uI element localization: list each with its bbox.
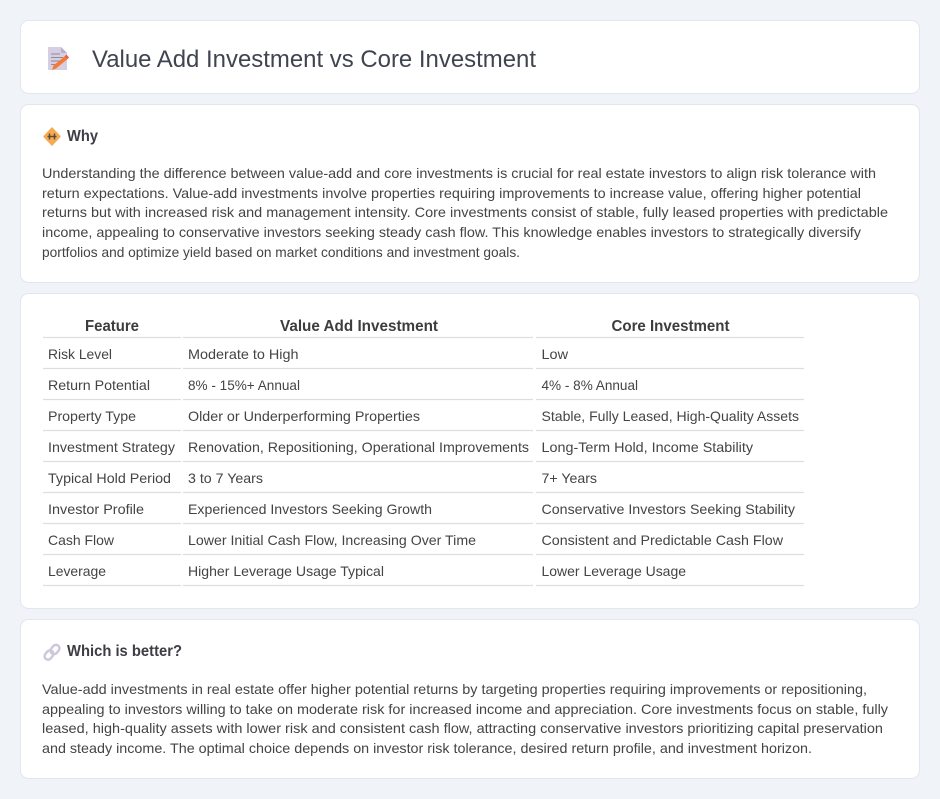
row: investor profile [48,501,795,517]
row: leverage: Lower Leverage Usage [542,563,686,579]
panel: header [20,20,920,94]
row: cash flow [48,532,784,548]
text block: which is better paragraph [42,681,888,756]
row: investor profile: Experienced Investors Seeking Growth [188,501,432,517]
row: cash flow: Lower Initial Cash Flow, Increasing Over Time [188,532,476,548]
heading: which is better: Which is better? [67,643,182,660]
row: investor profile: Investor Profile [48,501,144,517]
text block: why paragraph: Understanding the difference between value-add and core investments is crucial for real estate investors to align risk tolerance with [42,165,876,181]
text block: why paragraph: portfolios and optimize yield based on market conditions and investment goals. [42,244,520,260]
text block: why paragraph [42,165,888,260]
row: risk level: Low [542,346,569,362]
icon: chain link [43,643,61,661]
row: return potential [48,377,638,393]
text block: which is better paragraph: leased, high-quality assets with lower risk and consistent cash flow, attracting conservative investors prioritizing capital preservation [42,720,883,736]
row: risk level [48,346,569,362]
row: property type: Older or Underperforming Properties [188,408,420,424]
row: risk level: Moderate to High [188,346,298,362]
panel: why [20,104,920,282]
row: leverage: Higher Leverage Usage Typical [188,563,384,579]
row: risk level: Risk Level [48,346,112,362]
text block: why paragraph: return expectations. Value-add investments involve properties requiring improvements to increase value, offering higher potential [42,185,861,201]
text block: why paragraph: income, appealing to conservative investors seeking steady cash flow. This knowledge enables investors to strategically diversify [42,224,861,240]
row: typical hold period: 7+ Years [542,470,597,486]
row: property type [48,408,799,424]
panel: comparison table [20,294,920,608]
row: investment strategy: Long-Term Hold, Income Stability [542,439,753,455]
text block: which is better paragraph: appealing to investors willing to take on moderate risk for increased income and appreciation. Core investments focus on stable, fully [42,701,888,717]
row: property type: Stable, Fully Leased, High-Quality Assets [542,408,799,424]
icon: warning diamond [44,128,60,145]
row: investment strategy: Renovation, Repositioning, Operational Improvements [188,439,529,455]
row: leverage [48,563,686,579]
row: investment strategy: Investment Strategy [48,439,175,455]
row: cash flow: Cash Flow [48,532,115,548]
row: typical hold period: Typical Hold Period [48,470,171,486]
row: return potential: Return Potential [48,377,150,393]
row: cash flow: Consistent and Predictable Cash Flow [542,532,784,548]
row: typical hold period [48,470,597,486]
table header: Core Investment [612,318,730,335]
table header: Value Add Investment [280,318,439,335]
title: Value Add Investment vs Core Investment [92,46,536,73]
table header [85,318,730,335]
row: property type: Property Type [48,408,136,424]
text block: which is better paragraph: Value-add investments in real estate offer higher potential returns by targeting properties requiring improvements or repositioning, [42,681,867,697]
table header: Feature [85,318,139,335]
heading: why: Why [67,128,98,145]
panel: which is better [20,620,920,778]
row: investment strategy [48,439,753,455]
row: leverage: Leverage [48,563,106,579]
row: investor profile: Conservative Investors Seeking Stability [542,501,795,517]
row: return potential: 4% - 8% Annual [542,377,638,393]
text block: which is better paragraph: and steady income. The optimal choice depends on investor risk tolerance, desired return profile, and investment horizon. [42,740,812,756]
row: typical hold period: 3 to 7 Years [188,470,263,486]
row: return potential: 8% - 15%+ Annual [188,377,300,393]
text block: why paragraph: returns but with increased risk and management intensity. Core investments consist of stable, fully leased properties with predictable [42,204,888,220]
icon: document with pencil [48,47,69,70]
